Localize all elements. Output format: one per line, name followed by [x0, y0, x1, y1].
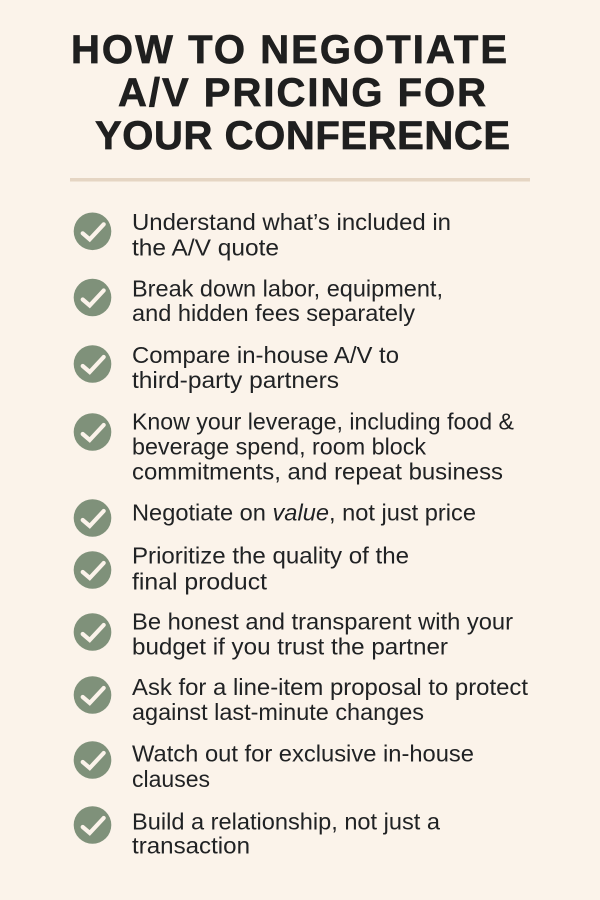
item 4: Know your leverage, including food &: [132, 408, 514, 434]
title: YOUR CONFERENCE: [95, 114, 510, 158]
title: A/V PRICING FOR: [118, 71, 486, 115]
item 6: Prioritize the quality of the: [132, 542, 409, 568]
item 5: [74, 499, 476, 537]
item 10: transaction: [132, 832, 250, 858]
item 5: Negotiate on value, not just price: [132, 500, 476, 526]
item 3: Compare in-house A/V to: [132, 342, 399, 368]
item 10: [74, 806, 440, 858]
item 1: Understand what’s included in: [132, 209, 451, 235]
item 3: third-party partners: [132, 367, 339, 393]
item 4: commitments, and repeat business: [132, 458, 503, 484]
checklist: [74, 209, 529, 858]
item 1: [74, 209, 451, 260]
item 10: Build a relationship, not just a: [132, 808, 440, 834]
item 9: clauses: [132, 766, 210, 792]
item 3: [74, 342, 399, 393]
item 8: against last-minute changes: [132, 699, 424, 725]
item 2: and hidden fees separately: [132, 300, 416, 326]
item 9: Watch out for exclusive in-house: [132, 740, 474, 766]
item 2: [74, 276, 443, 326]
title: HOW TO NEGOTIATE: [71, 28, 507, 72]
item 8: [74, 674, 529, 725]
item 7: budget if you trust the partner: [132, 634, 448, 660]
item 2: Break down labor, equipment,: [132, 276, 443, 302]
item 7: [74, 608, 513, 660]
item 8: Ask for a line-item proposal to protect: [132, 674, 529, 700]
item 4: [74, 408, 514, 484]
item 7: Be honest and transparent with your: [132, 608, 513, 634]
item 9: [74, 740, 474, 792]
item 6: [74, 542, 409, 594]
item 1: the A/V quote: [132, 234, 279, 260]
item 6: final product: [132, 568, 268, 594]
title: [71, 28, 510, 158]
item 4: beverage spend, room block: [132, 434, 427, 460]
